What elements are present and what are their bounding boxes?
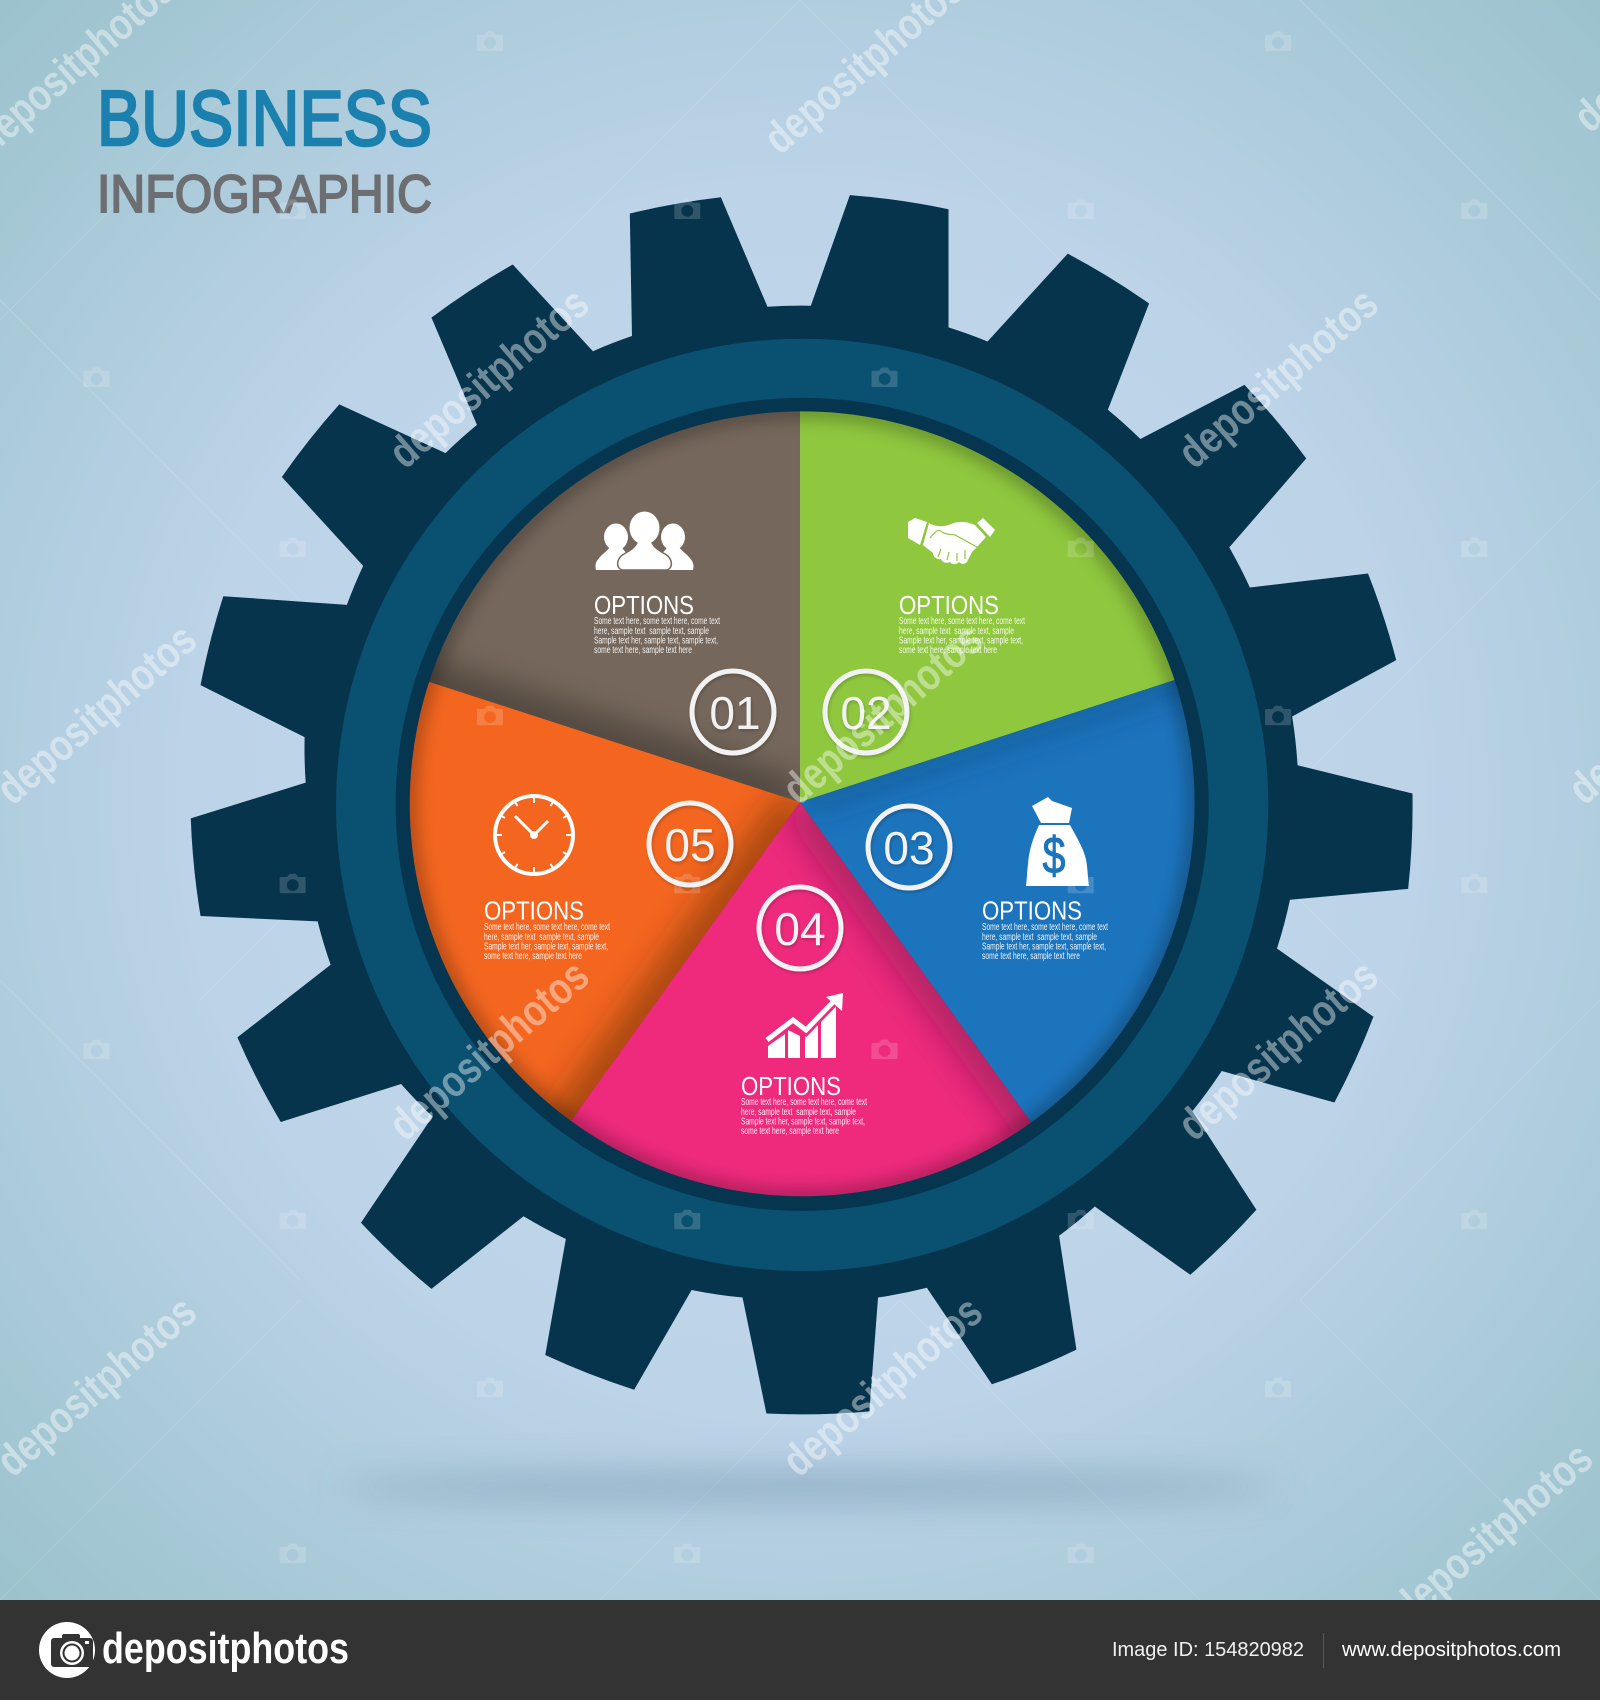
footer logo text: depositphotos <box>102 1624 349 1673</box>
icon: people <box>595 512 694 570</box>
number badge 04: 04 <box>774 903 826 955</box>
body text: Some text here, some text here, come text <box>484 922 610 933</box>
body text <box>484 922 610 962</box>
icon: money bag: $ <box>1042 827 1066 885</box>
body text: Some text here, some text here, come text <box>594 616 720 627</box>
title line 2: INFOGRAPHIC <box>97 165 432 224</box>
body text: here, sample text sample text, sample <box>899 626 1014 637</box>
segment 05 orange <box>410 682 800 1121</box>
body text: here, sample text sample text, sample <box>741 1107 856 1118</box>
body text: Some text here, some text here, come text <box>982 922 1108 933</box>
body text: Some text here, some text here, come text <box>741 1097 867 1108</box>
body text <box>741 1097 867 1137</box>
heading: OPTIONS <box>741 1071 841 1101</box>
footer logo icon <box>39 1622 95 1678</box>
pie chart <box>410 204 1195 1228</box>
body text: Some text here, some text here, come text <box>899 616 1025 627</box>
icon: handshake <box>908 518 995 564</box>
heading: OPTIONS <box>594 590 694 620</box>
body text <box>594 616 720 656</box>
watermarks: depositphotos <box>380 279 598 478</box>
icon: growth chart <box>767 993 843 1058</box>
gear graphic <box>191 195 1413 1414</box>
body text: here, sample text sample text, sample <box>982 932 1097 943</box>
image id: Image ID: 154820982 <box>1112 1639 1304 1661</box>
heading: OPTIONS <box>484 896 584 926</box>
panel: option 04 <box>741 887 867 1137</box>
gear teeth <box>191 195 1413 1414</box>
number badge 02: 02 <box>840 687 892 739</box>
number badge 01 <box>692 671 774 753</box>
title line 1: BUSINESS <box>97 74 432 162</box>
body text: some text here, sample text here <box>594 645 692 656</box>
body text <box>982 922 1108 962</box>
segment 01 brown <box>429 411 800 802</box>
body text: here, sample text sample text, sample <box>484 932 599 943</box>
segment 02 green <box>800 411 1174 802</box>
panel: option 02 <box>825 518 1025 753</box>
pie rim shadow <box>408 409 1197 1198</box>
watermarks: depositphotos <box>773 1287 992 1486</box>
body text <box>899 616 1025 656</box>
watermarks: depositphotos <box>380 951 598 1150</box>
panel: option 05 <box>484 796 731 962</box>
body text: Sample text her, sample text, sample text, <box>484 942 608 952</box>
number badge 02 <box>825 671 907 753</box>
panel: option 01 <box>594 512 774 753</box>
panel: option 03 <box>868 797 1108 962</box>
number badge 05 <box>649 803 731 885</box>
footer bar <box>0 1600 1600 1700</box>
watermarks: depositphotos <box>1169 279 1387 478</box>
number badge 03 <box>868 806 950 888</box>
number badge 01: 01 <box>709 687 761 739</box>
number badge 04 <box>759 887 841 969</box>
inner dark ring <box>396 398 1209 1211</box>
heading: OPTIONS <box>899 590 999 620</box>
icon: money bag <box>1026 797 1089 886</box>
segment 03 blue <box>800 680 1195 1122</box>
body text: Sample text her, sample text, sample text, <box>741 1116 865 1128</box>
body text: Sample text her, sample text, sample text, <box>594 636 718 646</box>
body text: some text here, sample text here <box>982 951 1080 962</box>
outer ring <box>336 339 1268 1271</box>
watermarks: depositphotos <box>773 615 992 814</box>
body text: here, sample text sample text, sample <box>594 626 709 637</box>
number badge 03: 03 <box>883 822 935 874</box>
body text: Sample text her, sample text, sample text, <box>899 636 1023 646</box>
icon: clock <box>495 796 573 874</box>
number badge 05: 05 <box>664 819 716 871</box>
website url: www.depositphotos.com <box>1341 1639 1561 1661</box>
heading: OPTIONS <box>982 896 1082 926</box>
watermarks: depositphotos <box>1169 951 1387 1150</box>
segment 04 pink <box>570 802 1032 1196</box>
body text: some text here, sample text here <box>899 645 997 656</box>
ground shadow <box>338 1471 1278 1503</box>
body text: some text here, sample text here <box>741 1126 839 1137</box>
body text: some text here, sample text here <box>484 951 582 962</box>
body text: Sample text her, sample text, sample text, <box>982 942 1106 952</box>
